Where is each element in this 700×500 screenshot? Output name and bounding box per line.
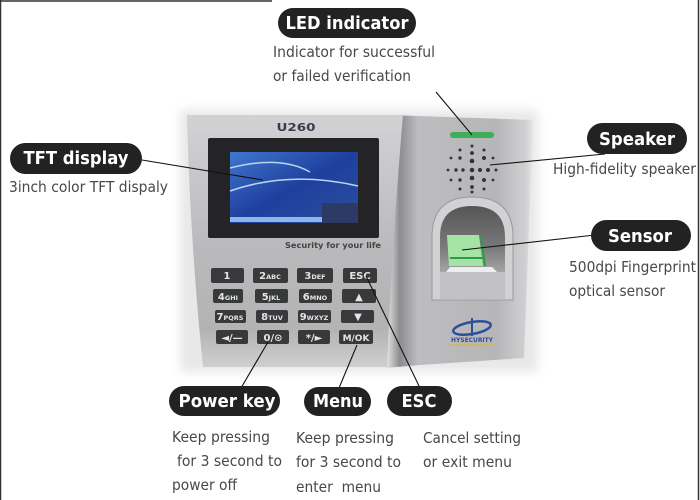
model name: U260 (276, 121, 316, 134)
callout: LED indicator (278, 8, 416, 38)
keypad: ◄/— (221, 333, 243, 344)
text: ESC description: Cancel setting (423, 429, 521, 447)
callout: Menu: Menu (313, 391, 363, 412)
callout: TFT display: TFT display (24, 148, 129, 169)
callout: ESC: ESC (402, 391, 436, 412)
text: Menu description: Keep pressing (296, 429, 394, 447)
keypad: ▼ (354, 312, 362, 323)
keypad: 2ABC (259, 271, 281, 282)
brand logo (450, 318, 494, 345)
keypad: 0/⊙ (264, 333, 282, 344)
text: Power key description: power off (172, 476, 238, 494)
text: Power key description (172, 428, 282, 494)
keypad: 4GHI (218, 292, 238, 303)
fingerprint sensor housing (432, 197, 513, 300)
keypad: */► (306, 333, 323, 344)
keypad: ▲ (355, 292, 363, 303)
arrow: speaker (490, 154, 605, 165)
arrow: ESC (366, 276, 420, 388)
keypad: ESC (349, 271, 371, 282)
TFT screen (208, 138, 379, 238)
white panel behind LED caption (272, 0, 440, 90)
arrow: sensor (462, 235, 595, 250)
soft halo behind device (180, 110, 538, 372)
arrow: TFT display (142, 160, 263, 180)
text: Sensor description: optical sensor (569, 282, 666, 300)
text: Power key description: Keep pressing (172, 428, 270, 446)
callout: Power key (169, 386, 280, 416)
text: Menu description (296, 429, 401, 496)
keypad: 1 (224, 271, 231, 282)
callout: LED indicator: LED indicator (286, 13, 409, 34)
speaker grille (447, 144, 498, 194)
arrow: power key (241, 342, 268, 388)
left face of device (187, 115, 403, 367)
text: Power key description: for 3 second to (177, 452, 282, 470)
device photo: U260 terminal (180, 110, 538, 372)
callout: Menu (304, 387, 371, 416)
text: LED indicator description: or failed verification (273, 67, 411, 85)
keypad: 6MNO (303, 292, 328, 303)
text: LED indicator description: Indicator for successful (273, 43, 435, 61)
slogan: Security for your life (285, 241, 382, 250)
brand logo: HYSECURITY (451, 337, 494, 344)
text: Menu description: enter menu (296, 478, 381, 496)
arrow: LED indicator (436, 92, 472, 135)
text: LED indicator description (273, 43, 435, 85)
callout: Speaker (587, 123, 687, 154)
text: Menu description: for 3 second to (296, 453, 401, 471)
callout: Sensor (591, 220, 691, 251)
text: TFT description: 3inch color TFT dispaly (9, 178, 168, 196)
callout: Sensor: Sensor (608, 226, 672, 247)
keypad: 3DEF (304, 271, 326, 282)
callout: Speaker: Speaker (599, 129, 675, 150)
callout: TFT display (10, 143, 142, 174)
keypad (211, 268, 377, 344)
callout: Power key: Power key (178, 391, 276, 412)
keypad: 7PQRS (217, 312, 244, 323)
text: ESC description (423, 429, 521, 471)
keypad: 5JKL (262, 292, 280, 303)
callout: ESC (387, 386, 452, 416)
arrow: menu (339, 345, 357, 388)
text: Sensor description (569, 258, 696, 300)
text: ESC description: or exit menu (423, 453, 512, 471)
LED indicator light (450, 132, 494, 138)
keypad: 8TUV (261, 312, 283, 323)
keypad: 9WXYZ (300, 312, 329, 323)
keypad: M/OK (343, 334, 370, 344)
right body of device (385, 115, 533, 368)
